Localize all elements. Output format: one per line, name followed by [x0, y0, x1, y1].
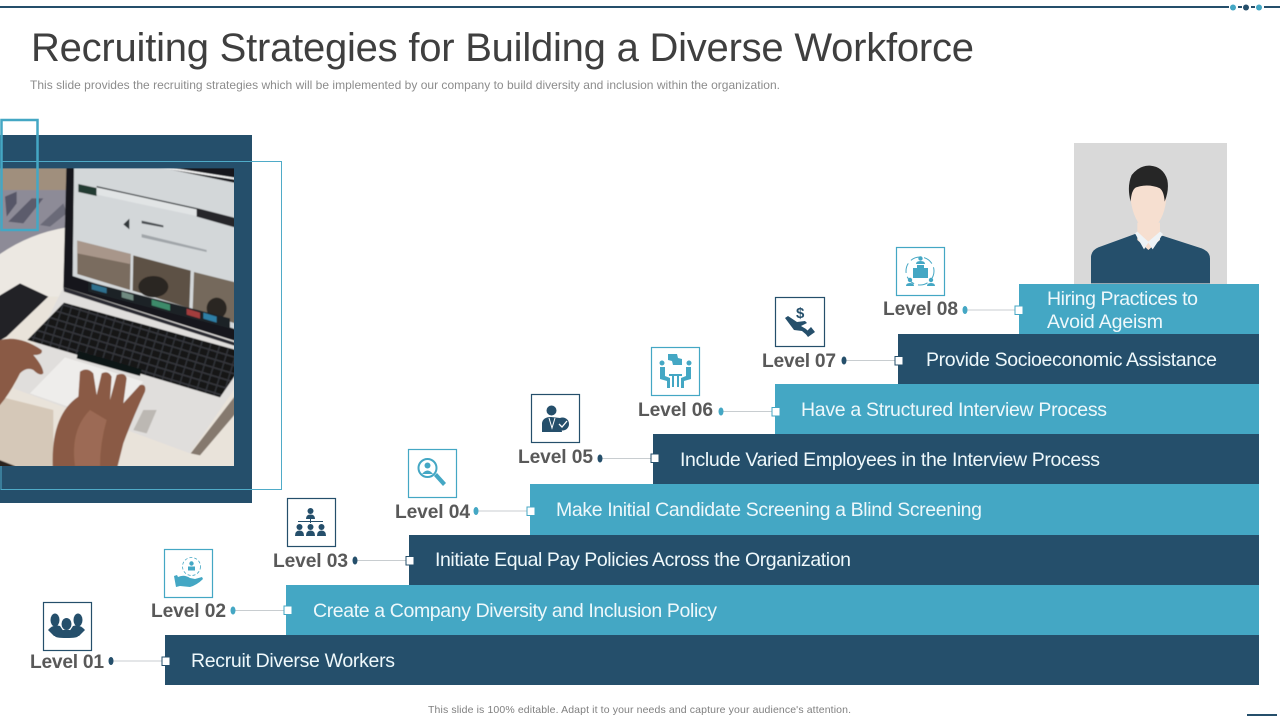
- bar text: Avoid Ageism: [1047, 311, 1163, 333]
- connector: [230, 606, 292, 614]
- thin outline frame: [1, 162, 282, 490]
- icon: hand holding dollar: $: [796, 305, 805, 322]
- connector: [474, 507, 535, 516]
- connector: [352, 556, 414, 565]
- bar: Create a Company Diversity and Inclusion Policy: [286, 585, 1259, 635]
- connector: [598, 454, 659, 462]
- teal accent rectangle: [2, 120, 38, 230]
- connector: [842, 356, 903, 365]
- photo frame: [0, 135, 252, 503]
- level 06: [638, 348, 1259, 434]
- label: Level 06: [638, 400, 713, 421]
- level 01: [30, 602, 1259, 685]
- bar text: Initiate Equal Pay Policies Across the Organization: [435, 549, 851, 571]
- level 08: [883, 248, 1259, 334]
- bar text: [1047, 288, 1198, 333]
- bar: Provide Socioeconomic Assistance: [898, 334, 1259, 384]
- icon: hand holding person: [164, 550, 212, 598]
- bar: Hiring Practices to Avoid Ageism: [1019, 284, 1259, 334]
- icon: employee with check mark: [532, 394, 580, 442]
- bar text: Recruit Diverse Workers: [191, 650, 395, 672]
- level 04: [395, 450, 1259, 535]
- bar text: Include Varied Employees in the Interview Process: [680, 449, 1100, 471]
- connector: [962, 306, 1023, 314]
- bar text: Make Initial Candidate Screening a Blind Screening: [556, 499, 982, 521]
- person illustration: [1074, 143, 1227, 284]
- icon: two people at table: [652, 348, 700, 396]
- level 05: [518, 394, 1259, 484]
- icon: briefcase with people circle: [896, 248, 944, 296]
- bar: Include Varied Employees in the Interview Process: [653, 434, 1259, 484]
- bar: Recruit Diverse Workers: [165, 635, 1259, 685]
- photo: laptop and hands: [0, 168, 234, 466]
- icon: magnifier over person: [408, 450, 456, 498]
- subtitle: This slide provides the recruiting strategies which will be implemented by our company to build diversity and inclusion within the organization.: [30, 78, 780, 92]
- icon: group of people: [44, 602, 92, 650]
- label: Level 05: [518, 447, 593, 468]
- bottom right rule: [1247, 714, 1277, 716]
- connector: [718, 408, 780, 416]
- label: Level 01: [30, 652, 104, 673]
- bar text: Hiring Practices to: [1047, 288, 1198, 310]
- connector: [108, 657, 170, 666]
- label: Level 03: [273, 551, 348, 572]
- level 07: [762, 298, 1259, 384]
- label: Level 04: [395, 502, 470, 523]
- bar: Make Initial Candidate Screening a Blind Screening: [530, 484, 1259, 535]
- top rule with dots: [0, 4, 1280, 10]
- icon: organization chart: [288, 498, 336, 546]
- title: Recruiting Strategies for Building a Diverse Workforce: [31, 26, 974, 70]
- label: Level 02: [151, 601, 226, 622]
- bar text: Have a Structured Interview Process: [801, 399, 1107, 421]
- level 03: [273, 498, 1259, 585]
- icon: hand holding dollar: [776, 298, 824, 346]
- bar: Have a Structured Interview Process: [775, 384, 1259, 434]
- panel: photo with frames: [0, 120, 281, 503]
- bar text: Provide Socioeconomic Assistance: [926, 349, 1217, 371]
- label: Level 07: [762, 351, 836, 372]
- label: Level 08: [883, 299, 958, 320]
- footer note: This slide is 100% editable. Adapt it to your needs and capture your audience's attention.: [428, 704, 851, 716]
- level 02: [151, 550, 1259, 635]
- bar text: Create a Company Diversity and Inclusion Policy: [313, 600, 717, 622]
- bar: Initiate Equal Pay Policies Across the Organization: [409, 535, 1259, 585]
